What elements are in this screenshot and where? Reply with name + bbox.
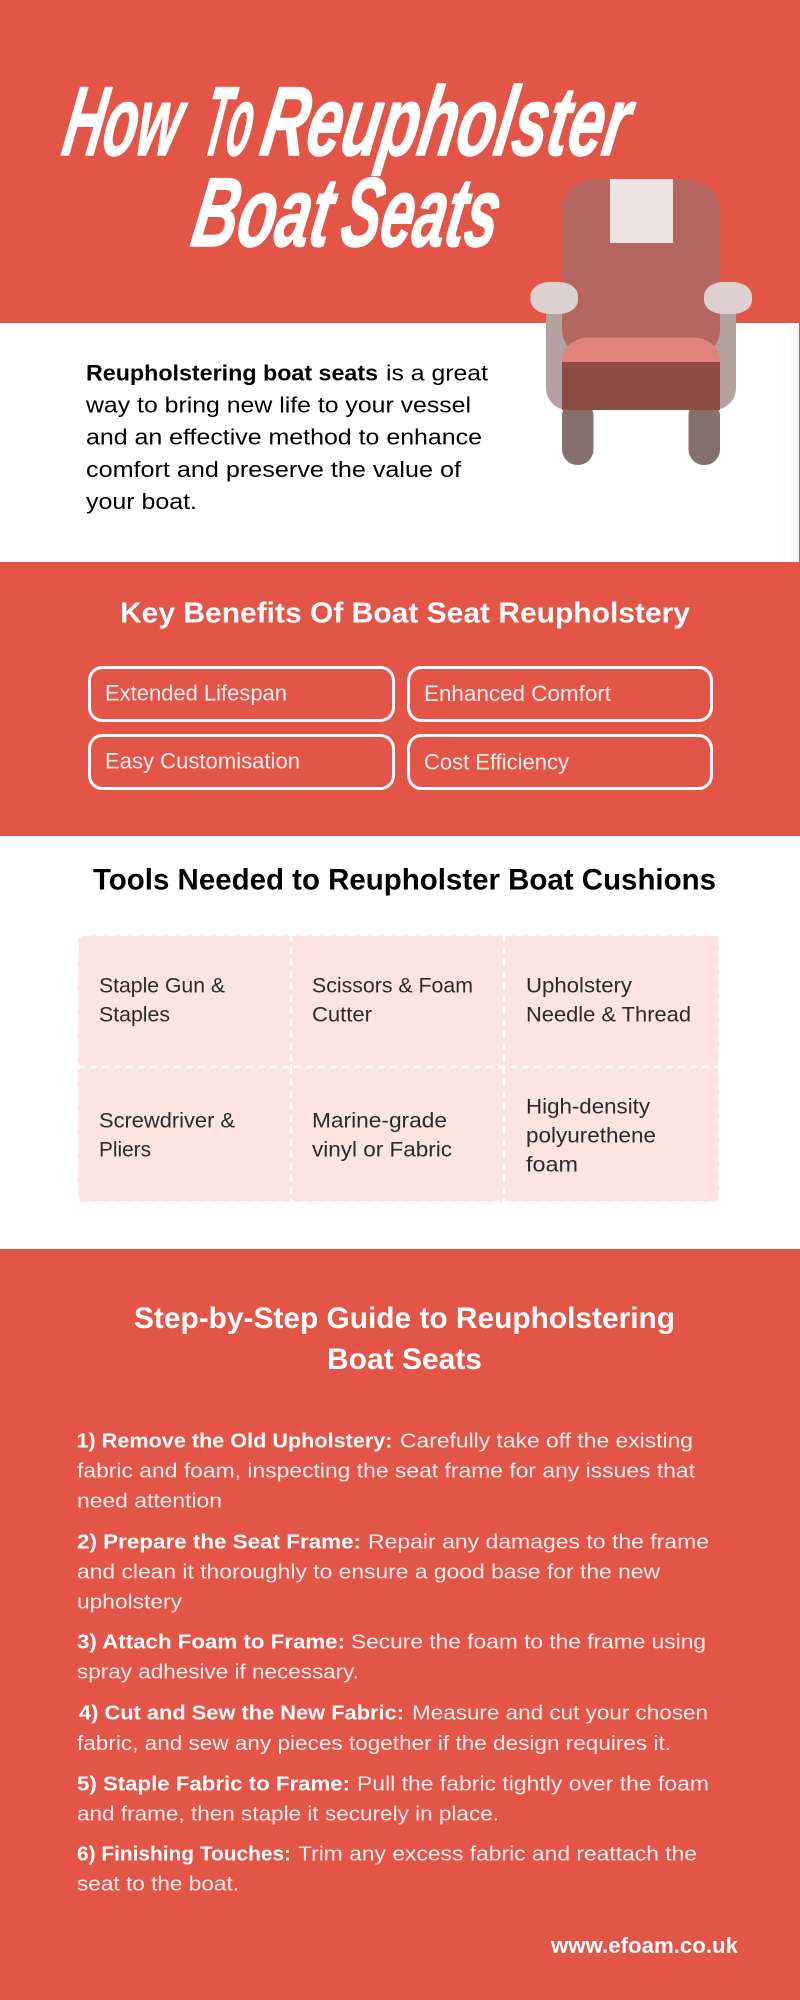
heading: step-by-step: Boat Seats [327, 1343, 482, 1376]
tool: scissors [312, 974, 473, 1027]
step 1 [76, 1430, 695, 1512]
benefit: extended lifespan: Extended Lifespan [105, 681, 287, 706]
step 1: 1) Remove the Old Upholstery: [76, 1430, 392, 1452]
step 3 [77, 1630, 706, 1684]
step 4 [77, 1702, 708, 1755]
tool: needle: Needle & Thread [526, 1003, 691, 1027]
step 5: 5) Staple Fabric to Frame: [77, 1772, 350, 1796]
tool: scissors: Scissors & Foam [312, 974, 473, 998]
tool: vinyl [312, 1108, 452, 1161]
tool: scissors: Cutter [312, 1003, 372, 1027]
benefit: cost efficiency [408, 736, 712, 788]
step 4: Measure and cut your chosen [412, 1702, 708, 1725]
heading: step-by-step: Step-by-Step Guide to Reupholstering [134, 1302, 675, 1335]
step 1: need attention [77, 1489, 222, 1512]
tool: foam: foam [526, 1153, 578, 1177]
panel: step-by-step guide [0, 1249, 800, 2000]
icon: boat seat [530, 179, 752, 465]
step 2: 2) Prepare the Seat Frame: [77, 1530, 361, 1554]
intro text: way to bring new life to your vessel [85, 392, 471, 418]
tool: screwdriver: Pliers [99, 1137, 151, 1161]
title: How [56, 67, 195, 176]
intro text: is a great [386, 360, 489, 385]
benefit: easy customisation [90, 736, 394, 788]
step 2 [77, 1530, 709, 1613]
title: Seats [334, 158, 510, 267]
intro text: and an effective method to enhance [86, 425, 482, 450]
step 1: fabric and foam, inspecting the seat frame for any issues that [77, 1460, 695, 1483]
panel: key benefits [0, 562, 800, 836]
tool: foam: polyurethene [526, 1124, 656, 1148]
step 1: Carefully take off the existing [400, 1430, 693, 1452]
step 6: Trim any excess fabric and reattach the [298, 1842, 697, 1865]
tool: staple gun: Staples [99, 1003, 170, 1027]
tool: vinyl: vinyl or Fabric [312, 1137, 452, 1161]
tool: foam [526, 1095, 656, 1177]
heading: key benefits: Key Benefits Of Boat Seat Reupholstery [120, 598, 690, 630]
step 3: Secure the foam to the frame using [351, 1630, 706, 1653]
step 2: Repair any damages to the frame [368, 1530, 709, 1554]
step 6 [77, 1842, 697, 1896]
tool: screwdriver [99, 1108, 235, 1161]
tool: staple gun [99, 974, 225, 1027]
benefit: extended lifespan [90, 668, 394, 720]
step 3: 3) Attach Foam to Frame: [77, 1630, 345, 1653]
step 4: 4) Cut and Sew the New Fabric: [79, 1702, 404, 1725]
benefit: enhanced comfort [408, 668, 712, 720]
benefit: easy customisation: Easy Customisation [105, 748, 300, 774]
heading: tools: Tools Needed to Reupholster Boat Cushions [93, 864, 716, 896]
benefit: enhanced comfort: Enhanced Comfort [424, 681, 611, 706]
tool: staple gun: Staple Gun & [99, 974, 225, 998]
panel: header background [0, 0, 800, 323]
tool: needle [526, 974, 691, 1027]
step 3: spray adhesive if necessary. [77, 1661, 359, 1684]
step 5: Pull the fabric tightly over the foam [357, 1772, 709, 1796]
step 4: fabric, and sew any pieces together if the design requires it. [77, 1732, 671, 1755]
step 2: and clean it thoroughly to ensure a good base for the new [77, 1561, 660, 1584]
intro text [85, 360, 489, 514]
tool: screwdriver: Screwdriver & [99, 1108, 235, 1132]
title: Boat [185, 158, 345, 267]
step 5 [77, 1772, 709, 1826]
website url: www.efoam.co.uk [550, 1933, 739, 1958]
step 6: 6) Finishing Touches: [77, 1842, 291, 1865]
step 5: and frame, then staple it securely in place. [77, 1803, 499, 1826]
tool: vinyl: Marine-grade [312, 1108, 447, 1132]
tool: needle: Upholstery [526, 974, 632, 998]
benefit: cost efficiency: Cost Efficiency [424, 749, 569, 774]
heading: step-by-step [134, 1302, 675, 1376]
intro text: comfort and preserve the value of [86, 457, 462, 482]
title: To [196, 67, 264, 176]
title [56, 67, 642, 267]
step 6: seat to the boat. [77, 1872, 239, 1896]
tool: foam: High-density [526, 1095, 650, 1119]
intro text: your boat. [86, 489, 197, 514]
step 2: upholstery [77, 1590, 183, 1613]
intro text: Reupholstering boat seats [86, 360, 378, 385]
panel: tools table [78, 935, 719, 1202]
